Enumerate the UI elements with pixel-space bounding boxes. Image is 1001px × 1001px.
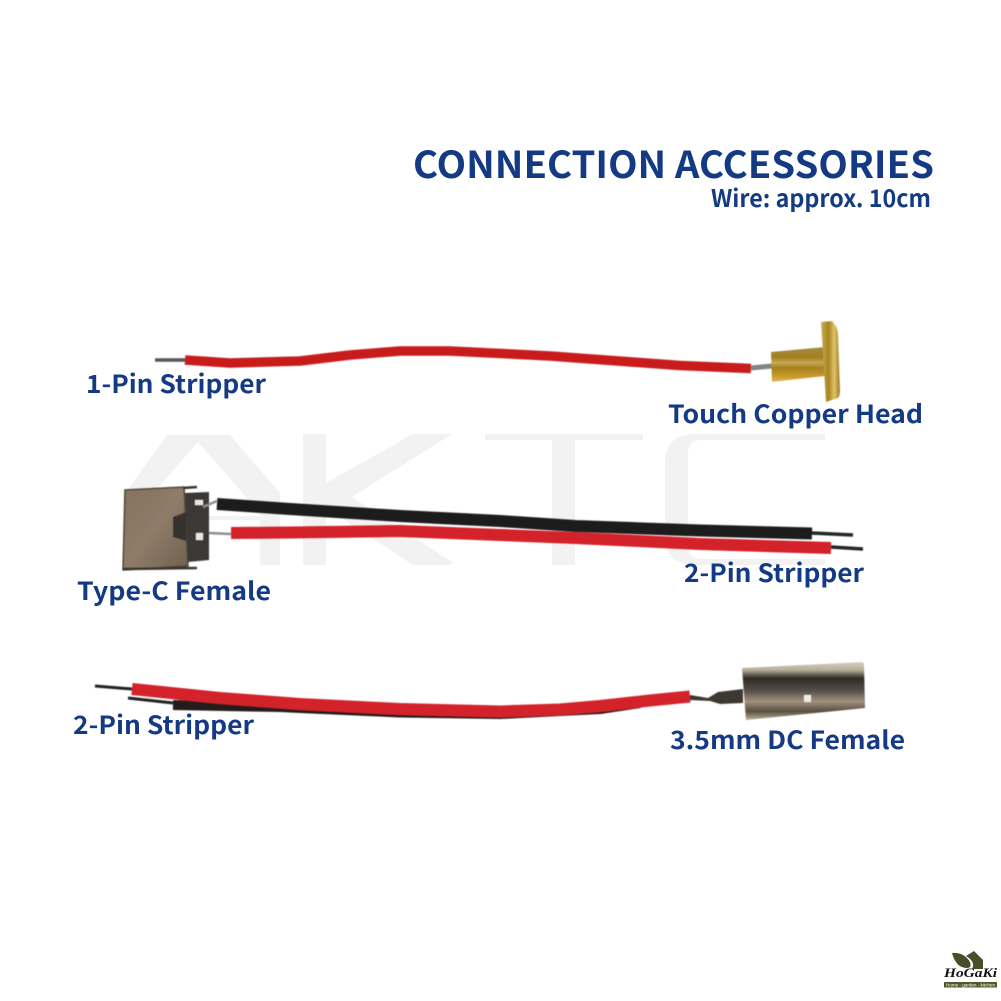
black wire (173, 703, 640, 714)
red wire (185, 351, 751, 368)
logo tagline bar (944, 982, 997, 988)
type-C dark housing (185, 492, 209, 562)
solder lead (690, 689, 743, 704)
logo: HoGaKi (943, 951, 998, 988)
bare conductor (751, 366, 772, 368)
type-C tabs (123, 487, 197, 569)
subtitle: wire length: Wire: approx. 10cm (711, 179, 931, 214)
wire: type-C to 2-pin stripper (123, 487, 863, 570)
solder pads (195, 500, 203, 540)
logo tagline: Home - garden - kitchen (946, 982, 995, 988)
type-C notch (173, 512, 186, 541)
stripped tips (95, 686, 173, 703)
red wire (231, 531, 831, 548)
label: touch copper head: Touch Copper Head (668, 395, 923, 431)
wire leads (203, 501, 231, 534)
icon: brass flange (821, 321, 840, 402)
barrel body (742, 662, 865, 720)
wire: 1-pin stripper to touch copper head (155, 321, 840, 402)
title: CONNECTION ACCESSORIES (413, 135, 934, 189)
barrel highlight (804, 695, 811, 702)
black wire (217, 504, 812, 534)
icon: leaf and house (952, 951, 983, 969)
logo wordmark: HoGaKi (943, 966, 998, 980)
type-C metal shell (123, 487, 188, 570)
label: 1-pin stripper: 1-Pin Stripper (86, 365, 266, 401)
watermark: AKTC (124, 434, 825, 565)
label: 2-pin stripper left: 2-Pin Stripper (73, 706, 254, 742)
wire: 2-pin stripper to 3.5mm DC female (95, 662, 865, 720)
stripped tip (155, 358, 186, 362)
red wire (132, 689, 690, 712)
label: 3.5mm DC female: 3.5mm DC Female (670, 721, 905, 757)
stripped tips (812, 533, 863, 549)
label: type-C female: Type-C Female (77, 572, 271, 608)
icon: brass body (771, 347, 825, 382)
label: 2-pin stripper right: 2-Pin Stripper (684, 554, 864, 590)
